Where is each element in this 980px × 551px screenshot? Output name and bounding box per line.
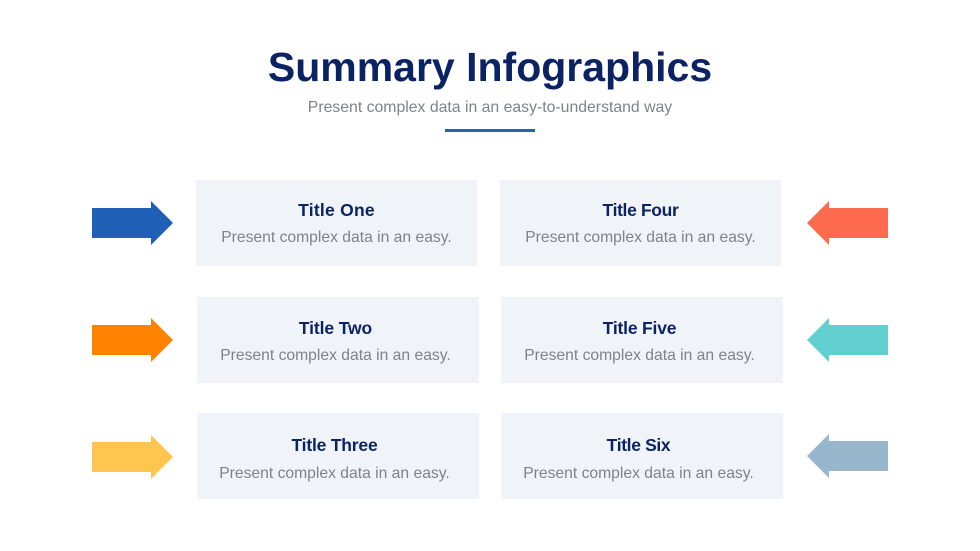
- icon: orange arrow: [92, 318, 173, 362]
- panel: title one: [196, 180, 477, 266]
- panel: title six: [501, 413, 783, 499]
- subtitle: Present complex data in an easy-to-understand way: [308, 99, 672, 116]
- panel: title five: [501, 297, 783, 383]
- title: Summary Infographics: [268, 44, 712, 90]
- panel: title three: Present complex data in an easy.: [219, 465, 450, 482]
- panel: title six: Present complex data in an easy.: [523, 465, 754, 482]
- panel: title four: [500, 180, 781, 266]
- icon: slate blue arrow: [807, 434, 888, 478]
- panel: title five: Present complex data in an easy.: [524, 347, 755, 364]
- panel: title three: Title Three: [292, 435, 377, 455]
- panel: title four: Present complex data in an easy.: [525, 229, 756, 246]
- panel: title two: Present complex data in an easy.: [220, 347, 451, 364]
- panel: title three: [197, 413, 479, 499]
- panel: title six: Title Six: [607, 435, 670, 455]
- icon: teal arrow: [807, 318, 888, 362]
- icon: blue arrow: [92, 201, 173, 245]
- panel: title five: Title Five: [603, 318, 676, 338]
- panel: title one: Title One: [298, 200, 375, 220]
- icon: coral arrow: [807, 201, 888, 245]
- icon: yellow arrow: [92, 435, 173, 479]
- panel: title four: Title Four: [603, 200, 678, 220]
- panel: title two: Title Two: [299, 318, 372, 338]
- title underline: [445, 129, 535, 132]
- panel: title one: Present complex data in an easy.: [221, 229, 452, 246]
- panel: title two: [197, 297, 479, 383]
